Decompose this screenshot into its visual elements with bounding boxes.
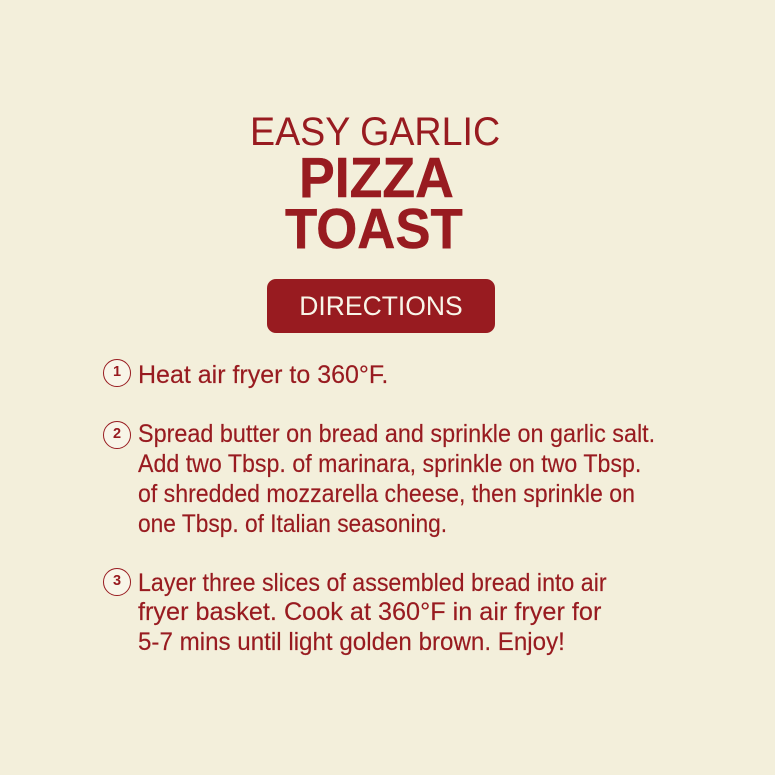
step 2 number: 2 — [113, 426, 121, 442]
step 1 — [103, 359, 388, 388]
step 2 number — [103, 421, 131, 449]
step 2 text: of shredded mozzarella cheese, then sprinkle on — [138, 480, 635, 508]
step 3 number — [103, 568, 131, 596]
title line: toast: TOAST — [285, 197, 463, 261]
step 3 text: Layer three slices of assembled bread into air — [138, 569, 607, 597]
step 3 — [103, 568, 607, 656]
step 1 number — [103, 359, 131, 387]
step 1 text: Heat air fryer to 360°F. — [138, 360, 388, 388]
step 2 text: one Tbsp. of Italian seasoning. — [138, 510, 447, 538]
step 2 — [103, 420, 655, 538]
directions badge: DIRECTIONS — [299, 291, 463, 321]
title line: pizza: PIZZA — [299, 146, 454, 210]
step 2 text: Add two Tbsp. of marinara, sprinkle on two Tbsp. — [138, 450, 641, 478]
title — [250, 110, 500, 261]
step 2 text: Spread butter on bread and sprinkle on garlic salt. — [138, 420, 655, 448]
directions badge — [267, 279, 495, 333]
step 3 number: 3 — [113, 572, 121, 588]
step 1 number: 1 — [113, 364, 121, 380]
step 3 text: 5-7 mins until light golden brown. Enjoy! — [138, 628, 565, 656]
title line: easy garlic: EASY GARLIC — [250, 110, 500, 154]
step 3 text — [138, 569, 607, 656]
step 3 text: fryer basket. Cook at 360°F in air fryer for — [138, 598, 601, 626]
step 2 text — [138, 420, 655, 538]
